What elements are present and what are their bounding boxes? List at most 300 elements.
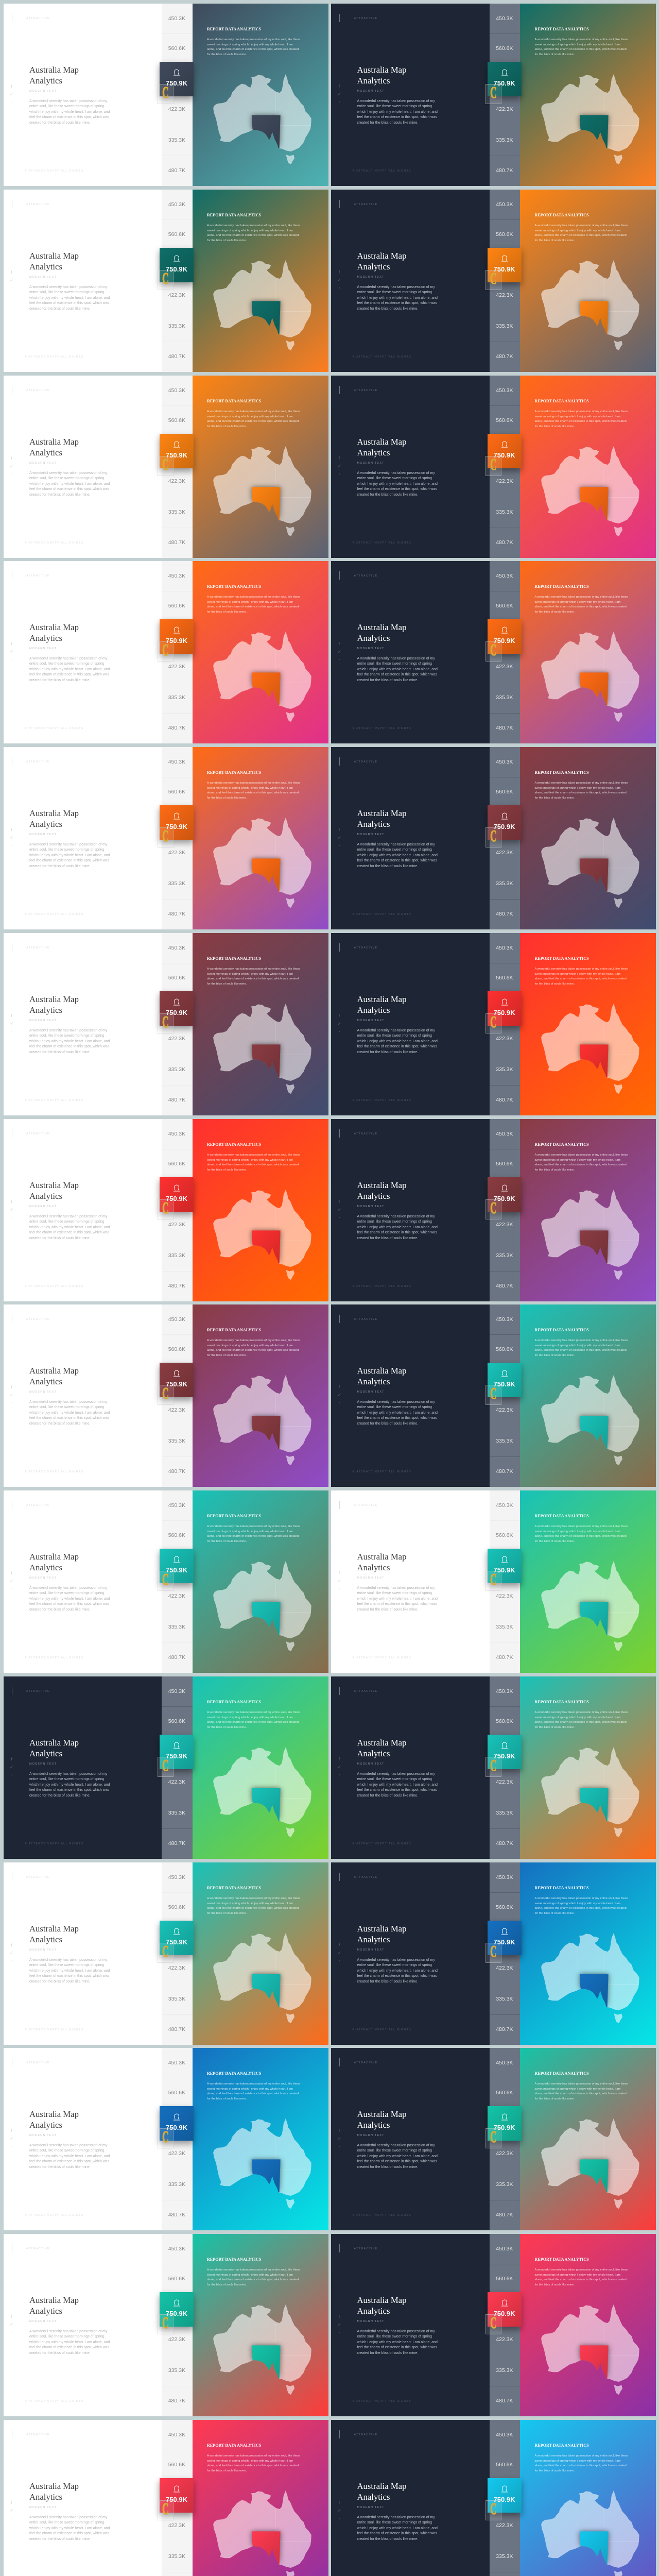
subtitle: MODERN TEXT	[29, 2506, 57, 2509]
title	[357, 1923, 406, 1944]
panel text: A wonderful serenity has taken possession of my entire soul, like these	[207, 2082, 300, 2086]
body text: feel the charm of existence in this spot, which was	[29, 1974, 109, 1978]
value column: 422.3K	[496, 2336, 513, 2343]
body text: feel the charm of existence in this spot, which was	[29, 1602, 109, 1606]
panel text: sweet mornings of spring which I enjoy with my whole heart. I am	[534, 2088, 620, 2091]
social icons	[10, 456, 13, 476]
panel text: for the bliss of souls like mine.	[534, 239, 575, 242]
panel text: for the bliss of souls like mine.	[207, 53, 247, 56]
social icons: ✓	[338, 1208, 340, 1212]
title	[29, 808, 79, 829]
panel text: sweet mornings of spring which I enjoy with my whole heart. I am	[207, 43, 293, 46]
highlight value	[487, 2478, 521, 2513]
panel text	[534, 1896, 628, 1916]
value column: 422.3K	[168, 2150, 185, 2157]
panel text: alone, and feel the charm of existence in this spot, which was created	[207, 1907, 299, 1910]
body text: which I enjoy with my whole heart. I am alone, and	[29, 110, 110, 114]
body text: which I enjoy with my whole heart. I am alone, and	[357, 1226, 438, 1229]
body text: A wonderful serenity has taken possession of my	[29, 657, 107, 660]
brand label: ATTRACTIVE	[26, 760, 50, 764]
title: Analytics	[29, 2492, 62, 2502]
brand label: ATTRACTIVE	[354, 2433, 377, 2436]
social icons: f	[339, 2129, 340, 2133]
value column: 560.6K	[496, 2276, 513, 2282]
panel text: alone, and feel the charm of existence in this spot, which was created	[207, 1721, 299, 1724]
panel text: alone, and feel the charm of existence in this spot, which was created	[534, 2092, 627, 2095]
panel heading: REPORT DATA ANALYTICS	[207, 27, 261, 31]
gradient panel	[520, 1304, 656, 1487]
body text: which I enjoy with my whole heart. I am alone, and	[29, 1226, 110, 1229]
brand label: ATTRACTIVE	[26, 1318, 50, 1321]
panel text: alone, and feel the charm of existence in this spot, which was created	[534, 977, 627, 980]
watermark: C	[162, 269, 169, 287]
social icons: ▫	[339, 1216, 340, 1219]
title: Australia Map	[357, 437, 406, 446]
highlight value: 750.9K	[494, 637, 515, 645]
title	[29, 1180, 79, 1201]
value column	[489, 190, 520, 372]
subtitle: MODERN TEXT	[357, 1391, 385, 1394]
body text: which I enjoy with my whole heart. I am alone, and	[29, 482, 110, 486]
body text: A wonderful serenity has taken possession of my	[29, 1215, 107, 1218]
title: Australia Map	[29, 1737, 79, 1748]
highlight value	[160, 2478, 194, 2513]
panel text: sweet mornings of spring which I enjoy with my whole heart. I am	[207, 1530, 293, 1533]
body text: created for the bliss of souls like mine.	[29, 1794, 91, 1798]
social icons: f	[11, 828, 12, 832]
highlight value	[487, 62, 521, 96]
value column: 480.7K	[168, 911, 185, 917]
value column: 422.3K	[168, 292, 185, 298]
slide 26	[331, 2234, 656, 2416]
title: Australia Map	[357, 1924, 406, 1933]
social icons: ✓	[10, 2509, 13, 2512]
map of Australia	[538, 1559, 643, 1653]
social icons: ▫	[11, 2331, 12, 2334]
panel text	[534, 781, 628, 801]
title: Analytics	[357, 1005, 390, 1015]
title: Australia Map	[357, 1180, 406, 1190]
brand label: ATTRACTIVE	[354, 17, 377, 20]
highlight value	[160, 805, 194, 840]
value column: 450.3K	[496, 759, 513, 765]
panel heading: REPORT DATA ANALYTICS	[534, 584, 589, 589]
slide 11	[3, 933, 328, 1115]
subtitle: MODERN TEXT	[357, 1205, 385, 1208]
watermark: C	[162, 1756, 169, 1774]
map of Australia	[210, 2488, 315, 2576]
body text: entire soul, like these sweet mornings of spring	[357, 291, 432, 294]
social icons: ✓	[338, 650, 340, 653]
value column: 450.3K	[168, 1688, 185, 1694]
panel text: for the bliss of souls like mine.	[207, 611, 247, 614]
value column: 335.3K	[496, 2181, 513, 2188]
body text: which I enjoy with my whole heart. I am alone, and	[29, 1969, 110, 1973]
highlight value: 750.9K	[166, 1009, 187, 1016]
value column: 560.6K	[168, 417, 185, 423]
value column	[162, 1490, 193, 1673]
footer: © ATTRACTIVEPPT ALL RIGHTS	[25, 1470, 83, 1473]
social icons	[337, 1198, 342, 1221]
body text: created for the bliss of souls like mine.	[357, 2165, 418, 2169]
title: Analytics	[357, 2492, 390, 2502]
value column: 422.3K	[168, 2522, 185, 2529]
footer: © ATTRACTIVEPPT ALL RIGHTS	[25, 1099, 83, 1102]
panel text: alone, and feel the charm of existence in this spot, which was created	[534, 420, 627, 423]
body text: created for the bliss of souls like mine.	[29, 1608, 91, 1612]
highlight value: 750.9K	[494, 265, 515, 273]
body text: feel the charm of existence in this spot, which was	[357, 673, 437, 676]
watermark: C	[490, 2127, 496, 2146]
panel text: for the bliss of souls like mine.	[534, 982, 575, 986]
body text: feel the charm of existence in this spot, which was	[29, 859, 109, 862]
value column	[162, 1119, 193, 1301]
brand label: ATTRACTIVE	[354, 1690, 377, 1693]
watermark: C	[490, 640, 496, 659]
highlight value: 750.9K	[494, 1752, 515, 1760]
social icons: ▫	[11, 844, 12, 847]
title: Australia Map	[357, 622, 406, 632]
map of Australia	[213, 74, 311, 165]
panel text	[534, 224, 628, 242]
value column: 335.3K	[168, 1810, 185, 1816]
social icons	[10, 271, 13, 290]
social icons: ✓	[10, 1393, 13, 1397]
gradient panel	[520, 1490, 656, 1673]
title	[357, 2108, 406, 2130]
panel heading: REPORT DATA ANALYTICS	[207, 1142, 261, 1147]
value column: 480.7K	[168, 2398, 185, 2404]
panel text	[534, 1338, 628, 1358]
social icons	[337, 1384, 342, 1406]
value column: 560.6K	[496, 1904, 513, 1910]
subtitle: MODERN TEXT	[357, 2134, 385, 2137]
title	[29, 1365, 79, 1387]
title: Analytics	[29, 1934, 62, 1944]
title: Australia Map	[29, 250, 79, 261]
social icons: ▫	[11, 2144, 12, 2148]
map of Australia	[213, 260, 311, 350]
watermark	[158, 1013, 174, 1033]
body text: feel the charm of existence in this spot, which was	[29, 1045, 109, 1048]
value column: 560.6K	[168, 2090, 185, 2096]
social icons: ✓	[10, 2137, 13, 2140]
title: Australia Map	[357, 2481, 406, 2490]
watermark: C	[162, 2499, 169, 2518]
subtitle: MODERN TEXT	[29, 1019, 57, 1022]
panel text: for the bliss of souls like mine.	[534, 53, 575, 56]
body text: created for the bliss of souls like mine.	[357, 1980, 418, 1984]
watermark	[485, 456, 501, 476]
panel text	[534, 2082, 628, 2102]
panel heading: REPORT DATA ANALYTICS	[534, 1886, 589, 1890]
value column: 335.3K	[168, 1252, 185, 1259]
body text: created for the bliss of souls like mine.	[29, 493, 91, 497]
subtitle: MODERN TEXT	[29, 647, 57, 650]
social icons: ▫	[339, 844, 340, 847]
value column: 480.7K	[496, 539, 513, 546]
body text: A wonderful serenity has taken possession of my	[29, 843, 107, 846]
social icons: f	[339, 1200, 340, 1204]
body text: which I enjoy with my whole heart. I am alone, and	[357, 1411, 438, 1415]
social icons: ▫	[11, 286, 12, 290]
value column: 480.7K	[168, 1468, 185, 1475]
social icons	[9, 2127, 14, 2150]
body text: feel the charm of existence in this spot, which was	[357, 1045, 437, 1048]
social icons: f	[339, 271, 340, 274]
body text: created for the bliss of souls like mine.	[29, 2351, 91, 2355]
title	[29, 250, 79, 271]
value column: 560.6K	[168, 1346, 185, 1352]
body text: entire soul, like these sweet mornings of spring	[357, 848, 432, 852]
footer: © ATTRACTIVEPPT ALL RIGHTS	[25, 1842, 83, 1845]
brand label: ATTRACTIVE	[26, 1504, 50, 1507]
social icons: ✓	[10, 465, 13, 468]
slide 6	[331, 376, 656, 558]
gradient panel	[193, 1862, 328, 2045]
body text: entire soul, like these sweet mornings of spring	[29, 2521, 105, 2524]
body text: entire soul, like these sweet mornings of spring	[29, 1034, 105, 1038]
value column: 480.7K	[496, 1654, 513, 1660]
highlight value	[160, 1921, 194, 1955]
map of Australia	[541, 74, 639, 165]
panel text: for the bliss of souls like mine.	[534, 1354, 575, 1357]
highlight value	[487, 434, 521, 468]
body text: A wonderful serenity has taken possession of my	[357, 2516, 435, 2519]
panel text: sweet mornings of spring which I enjoy with my whole heart. I am	[207, 2274, 293, 2277]
value column	[162, 376, 193, 558]
title: Australia Map	[357, 2109, 406, 2119]
value column: 480.7K	[496, 167, 513, 174]
social icons: ▫	[11, 1216, 12, 1219]
gradient panel	[520, 376, 656, 558]
body text: A wonderful serenity has taken possession of my	[29, 1772, 107, 1776]
title	[357, 2480, 406, 2502]
value column: 335.3K	[496, 137, 513, 143]
panel text: sweet mornings of spring which I enjoy with my whole heart. I am	[534, 787, 620, 790]
title: Australia Map	[357, 2295, 406, 2305]
body text: entire soul, like these sweet mornings of spring	[29, 477, 105, 480]
body text: feel the charm of existence in this spot, which was	[29, 115, 109, 119]
value column	[162, 1862, 193, 2045]
watermark: C	[490, 2499, 496, 2518]
panel text: sweet mornings of spring which I enjoy with my whole heart. I am	[207, 1902, 293, 1905]
highlight value	[487, 1363, 521, 1397]
value column: 422.3K	[168, 106, 185, 112]
title: Australia Map	[29, 65, 79, 74]
value column: 422.3K	[496, 2522, 513, 2529]
social icons: f	[11, 456, 12, 461]
body text	[29, 1586, 110, 1613]
social icons: f	[339, 1386, 340, 1389]
value column: 450.3K	[168, 2246, 185, 2252]
title: Analytics	[29, 2306, 62, 2315]
body text: created for the bliss of souls like mine.	[357, 121, 418, 125]
panel text: A wonderful serenity has taken possession of my entire soul, like these	[534, 2454, 628, 2458]
panel text: alone, and feel the charm of existence in this spot, which was created	[207, 977, 299, 980]
brand label: ATTRACTIVE	[354, 946, 377, 950]
value column: 422.3K	[168, 478, 185, 484]
value column: 335.3K	[168, 1438, 185, 1444]
panel text: for the bliss of souls like mine.	[534, 1726, 575, 1729]
highlight value: 750.9K	[166, 823, 187, 831]
value column	[162, 4, 193, 186]
panel text: alone, and feel the charm of existence in this spot, which was created	[534, 48, 627, 51]
value column: 480.7K	[496, 2212, 513, 2218]
panel heading: REPORT DATA ANALYTICS	[207, 2071, 261, 2076]
title: Australia Map	[357, 994, 406, 1004]
title: Australia Map	[29, 808, 79, 818]
panel text: A wonderful serenity has taken possession of my entire soul, like these	[534, 1525, 628, 1528]
watermark: C	[162, 1570, 169, 1588]
panel text: alone, and feel the charm of existence in this spot, which was created	[207, 605, 299, 608]
subtitle: MODERN TEXT	[29, 1948, 57, 1952]
panel text	[534, 1524, 628, 1544]
title	[357, 1737, 406, 1759]
watermark: C	[162, 1198, 169, 1217]
value column: 335.3K	[168, 694, 185, 701]
panel text: for the bliss of souls like mine.	[534, 2097, 575, 2100]
body text: entire soul, like these sweet mornings of spring	[357, 1034, 432, 1038]
social icons: ✓	[10, 1208, 13, 1212]
value column: 335.3K	[496, 2367, 513, 2374]
panel text: sweet mornings of spring which I enjoy with my whole heart. I am	[534, 1159, 620, 1162]
footer: © ATTRACTIVEPPT ALL RIGHTS	[25, 541, 83, 545]
social icons: ✓	[338, 465, 340, 468]
body text: feel the charm of existence in this spot, which was	[357, 2160, 437, 2163]
title: Analytics	[29, 1749, 62, 1758]
watermark	[158, 1571, 174, 1591]
body text: created for the bliss of souls like mine.	[357, 679, 418, 682]
body text: created for the bliss of souls like mine.	[29, 121, 91, 125]
value column: 335.3K	[168, 880, 185, 887]
panel text	[207, 2268, 300, 2287]
slide 27	[3, 2420, 328, 2576]
social icons: f	[11, 271, 12, 274]
body text: feel the charm of existence in this spot, which was	[357, 859, 437, 862]
highlight value	[160, 62, 194, 96]
body text: which I enjoy with my whole heart. I am alone, and	[357, 1969, 438, 1973]
body text: which I enjoy with my whole heart. I am alone, and	[357, 854, 438, 857]
brand label: ATTRACTIVE	[354, 389, 377, 392]
title	[29, 1551, 79, 1572]
footer: © ATTRACTIVEPPT ALL RIGHTS	[352, 1285, 411, 1288]
body text: entire soul, like these sweet mornings of spring	[357, 1777, 432, 1781]
title: Australia Map	[29, 2481, 79, 2490]
body text: A wonderful serenity has taken possession of my	[29, 1958, 107, 1962]
body text: A wonderful serenity has taken possession of my	[357, 657, 435, 660]
subtitle: MODERN TEXT	[357, 462, 385, 465]
panel text	[207, 1338, 300, 1358]
footer: © ATTRACTIVEPPT ALL RIGHTS	[352, 170, 411, 173]
value column: 480.7K	[496, 1468, 513, 1475]
body text: created for the bliss of souls like mine.	[357, 2537, 418, 2541]
highlight value	[487, 805, 521, 840]
gradient panel	[520, 1862, 656, 2045]
watermark: C	[162, 2127, 169, 2146]
map of Australia	[538, 1002, 643, 1096]
body text	[29, 99, 110, 125]
watermark	[485, 1385, 501, 1405]
value column: 450.3K	[168, 945, 185, 951]
body text: which I enjoy with my whole heart. I am alone, and	[357, 1597, 438, 1601]
value column: 560.6K	[496, 975, 513, 981]
social icons: ✓	[338, 93, 340, 96]
title	[357, 1551, 406, 1572]
value column: 480.7K	[168, 1283, 185, 1289]
value column: 480.7K	[496, 725, 513, 731]
social icons	[9, 2313, 14, 2336]
map of Australia	[538, 2488, 643, 2576]
social icons: f	[11, 1571, 12, 1575]
slide 17	[3, 1490, 328, 1673]
value column: 335.3K	[496, 1252, 513, 1259]
body text: A wonderful serenity has taken possession of my	[29, 1029, 107, 1032]
subtitle: MODERN TEXT	[29, 1577, 57, 1580]
value column: 335.3K	[496, 509, 513, 515]
panel text: sweet mornings of spring which I enjoy with my whole heart. I am	[534, 2274, 620, 2277]
value column: 560.6K	[168, 603, 185, 609]
gradient panel	[193, 4, 328, 186]
value column: 335.3K	[168, 2181, 185, 2188]
social icons: ✓	[338, 1580, 340, 1583]
body text: A wonderful serenity has taken possession of my	[29, 285, 107, 289]
value column: 335.3K	[496, 880, 513, 887]
panel text: alone, and feel the charm of existence in this spot, which was created	[207, 48, 299, 51]
value column: 335.3K	[168, 323, 185, 329]
map of Australia	[538, 630, 643, 724]
panel text	[207, 1153, 300, 1173]
body text: A wonderful serenity has taken possession of my	[357, 99, 435, 103]
social icons: f	[11, 1200, 12, 1204]
subtitle: MODERN TEXT	[357, 1762, 385, 1766]
social icons	[338, 271, 341, 290]
social icons: ✓	[10, 650, 13, 653]
body text: entire soul, like these sweet mornings of spring	[29, 1405, 105, 1409]
panel text: A wonderful serenity has taken possession of my entire soul, like these	[207, 1711, 300, 1714]
panel heading: REPORT DATA ANALYTICS	[207, 584, 261, 589]
value column: 480.7K	[168, 2026, 185, 2032]
slide 8	[331, 561, 656, 743]
panel text: sweet mornings of spring which I enjoy with my whole heart. I am	[534, 1902, 620, 1905]
body text: entire soul, like these sweet mornings of spring	[29, 662, 105, 666]
value column: 335.3K	[496, 323, 513, 329]
body text: created for the bliss of souls like mine.	[357, 2351, 418, 2355]
panel text: sweet mornings of spring which I enjoy with my whole heart. I am	[534, 415, 620, 418]
body text: created for the bliss of souls like mine.	[29, 1236, 91, 1240]
panel text: sweet mornings of spring which I enjoy with my whole heart. I am	[534, 1344, 620, 1347]
watermark: C	[162, 1942, 169, 1960]
value column: 560.6K	[496, 1532, 513, 1538]
panel text: A wonderful serenity has taken possession of my entire soul, like these	[534, 410, 628, 413]
panel heading: REPORT DATA ANALYTICS	[534, 399, 589, 403]
social icons	[337, 640, 342, 664]
panel text: for the bliss of souls like mine.	[534, 1540, 575, 1543]
social icons: ▫	[11, 472, 12, 476]
body text: A wonderful serenity has taken possession of my	[29, 1586, 107, 1590]
slide 7	[3, 561, 328, 743]
value column: 480.7K	[168, 1840, 185, 1846]
watermark	[158, 1943, 174, 1963]
body text	[357, 2329, 438, 2357]
body text: feel the charm of existence in this spot, which was	[357, 115, 437, 119]
body text: created for the bliss of souls like mine.	[29, 2537, 91, 2541]
footer: © ATTRACTIVEPPT ALL RIGHTS	[25, 727, 83, 730]
footer: © ATTRACTIVEPPT ALL RIGHTS	[25, 2028, 83, 2031]
gradient panel	[520, 747, 656, 929]
panel text: A wonderful serenity has taken possession of my entire soul, like these	[534, 2268, 628, 2272]
footer: © ATTRACTIVEPPT ALL RIGHTS	[25, 1285, 83, 1288]
